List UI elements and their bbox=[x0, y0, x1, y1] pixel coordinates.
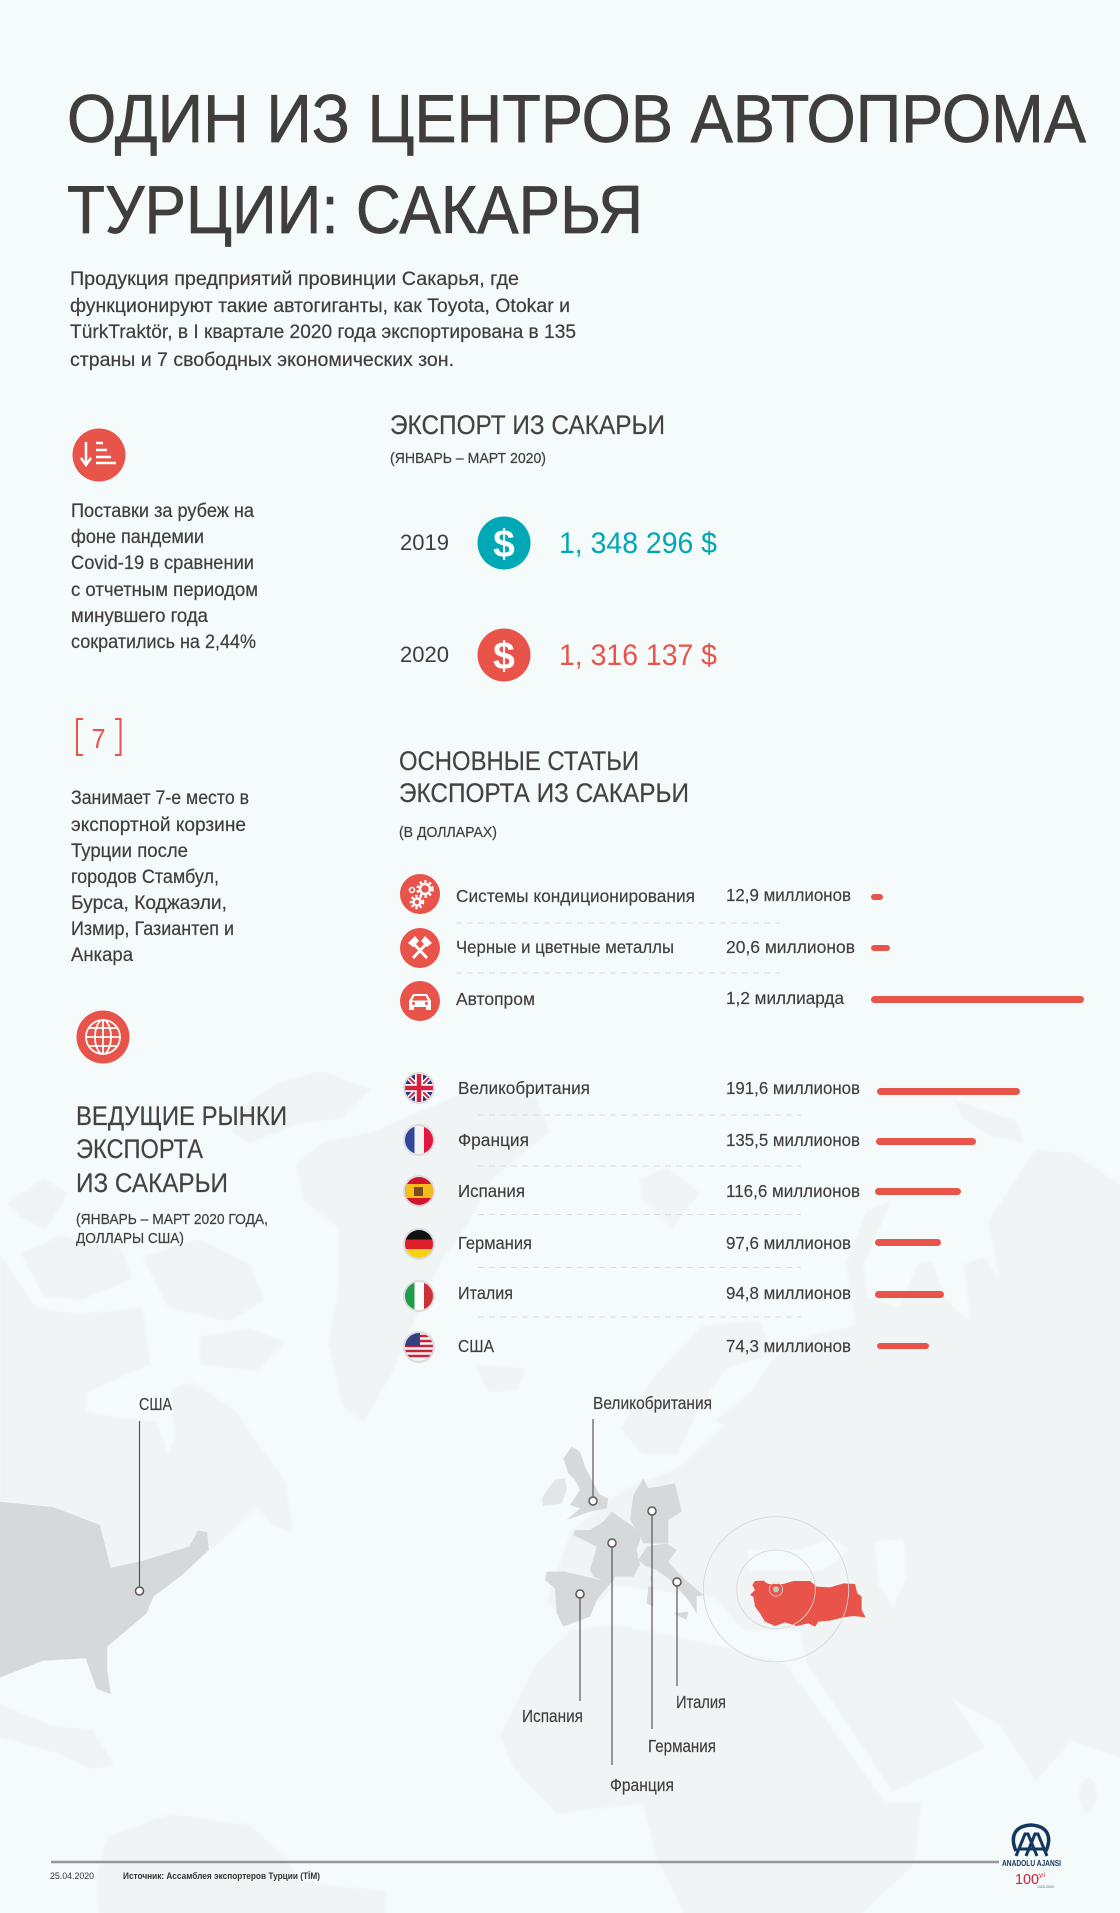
row: Italy: 94,8 миллионов bbox=[726, 1283, 851, 1303]
pin: USA bbox=[136, 1394, 172, 1595]
row: air conditioning systems: 12,9 миллионов bbox=[726, 885, 851, 905]
heading: leading markets: ИЗ САКАРЬИ bbox=[76, 1168, 228, 1198]
text: decline in exports: фоне пандемии bbox=[71, 527, 204, 548]
text: seventh place: городов Стамбул, bbox=[71, 867, 219, 888]
text: seventh place: экспортной корзине bbox=[71, 815, 246, 836]
text: seventh place: Занимает 7-е место в bbox=[71, 788, 249, 809]
footer: date and source: Источник: Ассамблея экспортеров Турции (TİM) bbox=[123, 1871, 320, 1882]
export value 2019: 2019 bbox=[400, 530, 449, 555]
title: ТУРЦИИ: САКАРЬЯ bbox=[67, 172, 643, 248]
row: ferrous and non-ferrous metals: 20,6 миллионов bbox=[726, 937, 855, 957]
heading: exports from Sakarya bbox=[390, 410, 665, 467]
row: automotive bbox=[400, 981, 1084, 1021]
intro paragraph: страны и 7 свободных экономических зон. bbox=[70, 350, 454, 371]
row: automotive: Автопром bbox=[456, 989, 535, 1009]
heading: leading markets: ДОЛЛАРЫ США) bbox=[76, 1230, 184, 1247]
chart: leading markets bbox=[403, 1072, 1020, 1363]
text: decline in exports: с отчетным периодом bbox=[71, 580, 258, 601]
world map background bbox=[0, 1071, 1120, 1913]
pin: Spain bbox=[522, 1590, 584, 1726]
text: seventh place: Измир, Газиантеп и bbox=[71, 919, 234, 940]
pin: Germany bbox=[648, 1507, 716, 1756]
text: decline in exports: Covid-19 в сравнении bbox=[71, 553, 254, 574]
map: Turkey with radar circles bbox=[703, 1517, 866, 1662]
heading: leading markets bbox=[76, 1101, 287, 1247]
pin: Italy bbox=[673, 1578, 726, 1712]
logo: Anadolu Agency: 1920-2020 bbox=[1037, 1885, 1054, 1889]
export value 2020: $ bbox=[493, 635, 515, 678]
text: seventh place: Бурса, Коджаэли, bbox=[71, 893, 227, 914]
export value 2020 bbox=[400, 628, 717, 682]
pin: Spain: Испания bbox=[522, 1706, 583, 1726]
text: seventh place: Анкара bbox=[71, 945, 133, 966]
export value 2020: 2020 bbox=[400, 642, 449, 667]
heading: exports from Sakarya: (ЯНВАРЬ – МАРТ 2020) bbox=[390, 450, 546, 467]
row: France: Франция bbox=[458, 1130, 529, 1150]
row: France bbox=[403, 1124, 976, 1156]
heading: leading markets: (ЯНВАРЬ – МАРТ 2020 ГОДА, bbox=[76, 1211, 268, 1228]
intro paragraph bbox=[70, 269, 576, 371]
row: ferrous and non-ferrous metals bbox=[400, 928, 890, 968]
chart: export items bbox=[400, 874, 1084, 1021]
icon: globe bbox=[76, 1010, 130, 1064]
map: highlighted European countries bbox=[542, 1447, 703, 1627]
row: Spain: 116,6 миллионов bbox=[726, 1181, 860, 1201]
icon: bracketed 7: 7 bbox=[92, 723, 106, 754]
text: decline in exports bbox=[71, 501, 258, 653]
heading: main export items: (В ДОЛЛАРАХ) bbox=[399, 824, 497, 841]
row: United Kingdom bbox=[403, 1072, 1020, 1104]
row: air conditioning systems: Системы кондиционирования bbox=[456, 886, 695, 906]
row: USA: 74,3 миллионов bbox=[726, 1336, 851, 1356]
export value 2019: 1, 348 296 $ bbox=[559, 527, 717, 560]
row: United Kingdom: Великобритания bbox=[458, 1078, 590, 1098]
text: decline in exports: минувшего года bbox=[71, 606, 208, 627]
export value 2020: 1, 316 137 $ bbox=[559, 639, 717, 672]
logo: Anadolu Agency bbox=[1002, 1825, 1061, 1889]
heading: main export items bbox=[399, 746, 689, 841]
row: Germany bbox=[403, 1228, 941, 1260]
pin: Germany: Германия bbox=[648, 1736, 716, 1756]
heading: exports from Sakarya: ЭКСПОРТ ИЗ САКАРЬИ bbox=[390, 410, 665, 440]
icon: bracketed 7 bbox=[77, 719, 120, 755]
pin: Italy: Италия bbox=[676, 1692, 726, 1712]
row: ferrous and non-ferrous metals: Черные и цветные металлы bbox=[456, 937, 674, 957]
pin: United Kingdom: Великобритания bbox=[593, 1393, 712, 1413]
pin: USA: США bbox=[139, 1394, 172, 1414]
heading: leading markets: ВЕДУЩИЕ РЫНКИ bbox=[76, 1101, 287, 1131]
row: Italy: Италия bbox=[458, 1283, 513, 1303]
icon: declining exports bbox=[72, 428, 126, 482]
row: air conditioning systems bbox=[400, 874, 883, 914]
export value 2019: $ bbox=[493, 523, 515, 566]
logo: Anadolu Agency: ANADOLU AJANSI bbox=[1002, 1858, 1061, 1868]
intro paragraph: Продукция предприятий провинции Сакарья, где bbox=[70, 269, 519, 290]
footer: date and source bbox=[50, 1862, 999, 1882]
text: seventh place: Турции после bbox=[71, 841, 188, 862]
row: Spain bbox=[403, 1175, 961, 1207]
row: USA: США bbox=[458, 1336, 494, 1356]
heading: leading markets: ЭКСПОРТА bbox=[76, 1134, 203, 1164]
text: seventh place bbox=[71, 788, 249, 966]
row: Germany: 97,6 миллионов bbox=[726, 1233, 851, 1253]
row: United Kingdom: 191,6 миллионов bbox=[726, 1078, 860, 1098]
intro paragraph: TürkTraktör, в I квартале 2020 года экспортирована в 135 bbox=[70, 322, 576, 343]
pin: France: Франция bbox=[610, 1775, 674, 1795]
pin: France bbox=[608, 1539, 674, 1795]
map highlight: USA bbox=[0, 1502, 209, 1694]
row: Italy bbox=[403, 1280, 944, 1312]
intro paragraph: функционируют такие автогиганты, как Toyota, Otokar и bbox=[70, 296, 570, 317]
logo: Anadolu Agency: yıl bbox=[1039, 1873, 1045, 1879]
text: decline in exports: сократились на 2,44% bbox=[71, 632, 256, 653]
row: Spain: Испания bbox=[458, 1181, 525, 1201]
title bbox=[67, 81, 1087, 248]
row: automotive: 1,2 миллиарда bbox=[726, 988, 844, 1008]
row: USA bbox=[403, 1331, 929, 1363]
export value 2019 bbox=[400, 516, 717, 570]
pin: United Kingdom bbox=[589, 1393, 712, 1505]
row: Germany: Германия bbox=[458, 1233, 532, 1253]
footer: date and source: 25.04.2020 bbox=[50, 1871, 94, 1882]
text: decline in exports: Поставки за рубеж на bbox=[71, 501, 254, 522]
logo: Anadolu Agency: 100 bbox=[1015, 1871, 1039, 1888]
heading: main export items: ОСНОВНЫЕ СТАТЬИ bbox=[399, 746, 639, 776]
row: France: 135,5 миллионов bbox=[726, 1130, 860, 1150]
heading: main export items: ЭКСПОРТА ИЗ САКАРЬИ bbox=[399, 778, 689, 808]
